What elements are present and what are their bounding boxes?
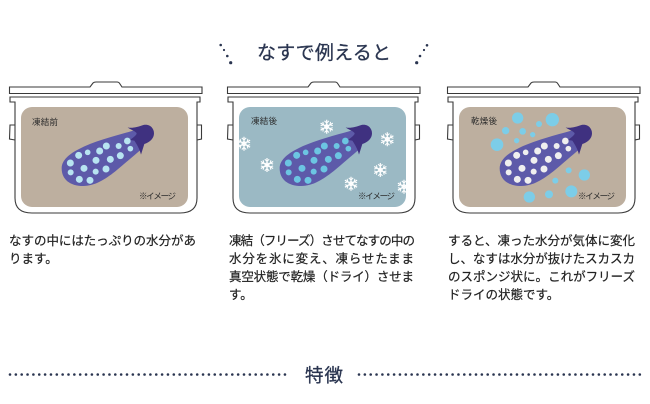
text block: after drying: し、なすは水分が抜けたスカスカ (448, 251, 635, 266)
text block: after drying: ドライの状態です。 (448, 288, 559, 302)
note: image only: ※イメージ (358, 191, 395, 201)
label: before freezing: 凍結前 (32, 117, 58, 127)
text block: before freezing (9, 233, 196, 266)
icon: snowflakes (238, 120, 410, 194)
icon: pot (448, 82, 640, 213)
text block: after freezing: 凍結（フリーズ）させてなすの中の (229, 233, 415, 248)
dotted rule left (10, 373, 288, 376)
text block: after freezing: 水分を氷に変え、凍らせたまま (229, 251, 414, 266)
text block: after freezing: 真空状態で乾燥（ドライ）させま (229, 270, 414, 284)
text block: after freezing (229, 233, 415, 302)
text block: after drying: のスポンジ状に。これがフリーズ (448, 269, 635, 284)
text block: after drying: すると、凍った水分が気体に変化 (448, 233, 635, 248)
decorative dots: right of title (415, 44, 428, 64)
icon: eggplant with water dots (62, 125, 154, 186)
icon: water vapor bubbles (491, 112, 590, 203)
image background: beige (459, 107, 626, 207)
note: image only: ※イメージ (139, 191, 176, 201)
image background: blue (239, 107, 406, 207)
heading text: なすで例えると (257, 42, 391, 64)
label: after drying: 乾燥後 (471, 116, 497, 126)
label: after freezing: 凍結後 (251, 116, 277, 126)
icon: eggplant with empty pores (500, 125, 592, 186)
title (219, 42, 428, 64)
icon: eggplant with ice crystals (280, 125, 372, 186)
text block: before freezing: ります。 (9, 252, 58, 266)
text block: after drying (448, 233, 635, 302)
note: image only: ※イメージ (578, 191, 615, 201)
panel: after freezing (228, 82, 420, 213)
dotted rule right (359, 373, 640, 376)
text block: after freezing: す。 (229, 288, 253, 302)
panel: after drying (448, 82, 640, 213)
icon: pot (10, 82, 202, 213)
panel: before freezing (10, 82, 202, 213)
heading text: 特徴 (305, 365, 343, 386)
text block: before freezing: なすの中にはたっぷりの水分があ (9, 233, 196, 248)
icon: pot (228, 82, 420, 213)
image background: beige (21, 107, 188, 207)
decorative dots: left of title (219, 44, 232, 64)
